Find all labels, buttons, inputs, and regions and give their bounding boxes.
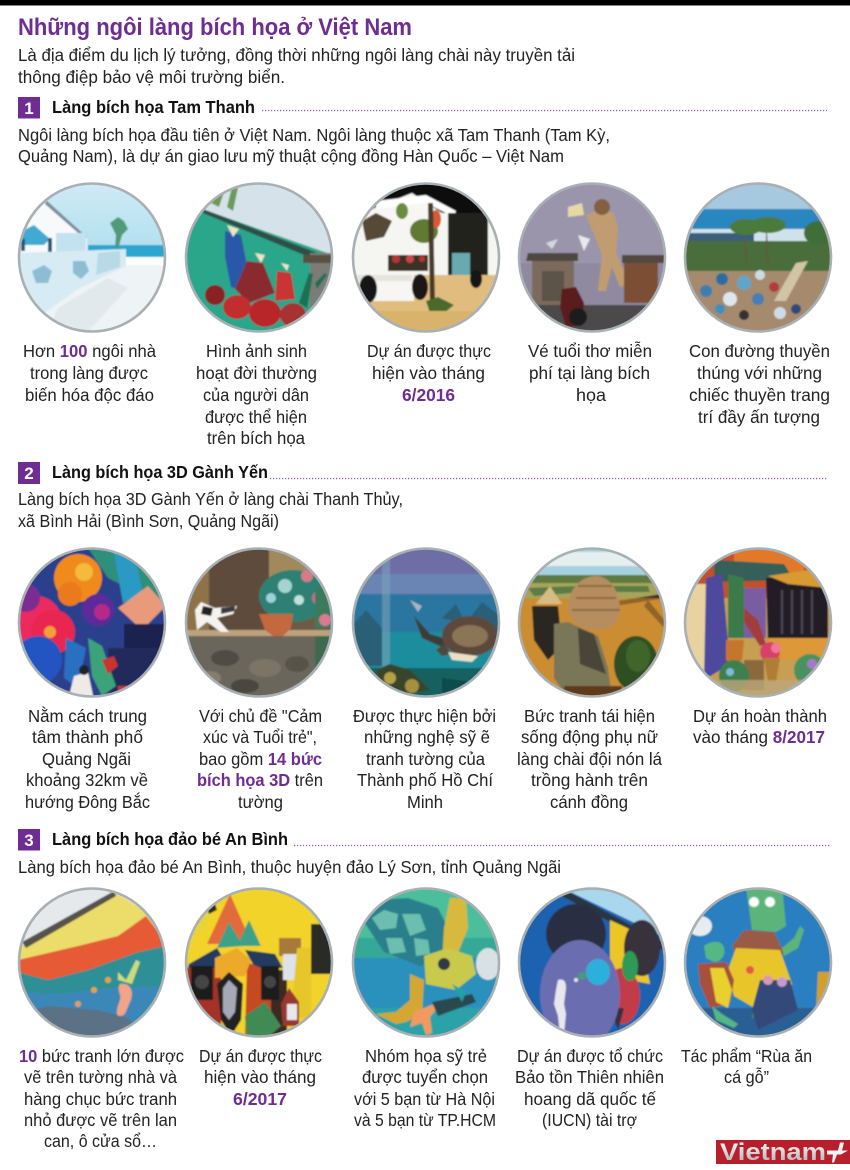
caption 2-2: bích họa 3D trên [197,770,323,790]
caption 2-2: xúc và Tuổi trẻ", [203,727,317,747]
photo 2-4: farmer in conical hat [518,548,666,698]
photo 1-5: aerial of basket boats and palms [684,183,832,333]
photo 3-2: geometric bird mural [185,888,333,1038]
caption 2-5: vào tháng 8/2017 [693,727,825,747]
caption 2-4: Bức tranh tái hiện [524,706,655,726]
section 1 heading: Làng bích họa Tam Thanh [52,97,255,117]
caption 2-3: những nghệ sỹ ẽ [364,727,490,747]
caption 1-3 [367,341,491,405]
caption 3-1: nhỏ được vẽ trên lan [24,1110,177,1130]
caption 1-3: Dự án được thực [367,341,491,361]
caption 2-5 [693,706,827,747]
caption 1-2 [196,341,317,448]
intro text [18,45,575,87]
section 2 heading [18,462,827,484]
photo 3-3: turtle mural in teal [352,888,500,1038]
caption 2-2: tường [238,792,283,812]
caption 1-1: biến hóa độc đáo [25,385,154,405]
photo 3-5: turtles eating fish mural [684,886,832,1038]
logo: Vietnam+: Vietnam [720,1139,826,1166]
caption 1-1: Hơn 100 ngôi nhà [23,341,156,361]
section 2 heading: Làng bích họa 3D Gành Yến [52,462,268,482]
caption 3-3: được tuyển chọn [362,1067,488,1087]
section 2 heading: 2 [24,464,34,483]
photo 3-1: wave wall with seahorse [18,888,166,1038]
section 1 heading: 1 [24,99,34,118]
caption 3-2: hiện vào tháng [204,1067,316,1087]
caption 3-4: hoang dã quốc tế [524,1089,656,1109]
section 1 description [18,125,610,166]
photo 1-2: green mural wall [185,183,333,333]
caption 1-5 [689,341,830,427]
caption 3-4: Bảo tồn Thiên nhiên [515,1067,664,1087]
caption 2-2: bao gồm 14 bức [199,749,322,769]
section 1 description: Quảng Nam), là dự án giao lưu mỹ thuật cộng đồng Hàn Quốc – Việt Nam [18,146,564,166]
caption 2-4: cánh đồng [550,792,628,812]
photo 1-1: white houses by the sea [18,183,168,332]
caption 3-2 [199,1046,322,1109]
section 1 heading [18,97,827,118]
caption 2-1: tâm thành phố [32,727,143,747]
caption 3-2: 6/2017 [233,1089,287,1109]
title: Những ngôi làng bích họa ở Việt Nam [18,14,412,41]
caption 2-1: hướng Đông Bắc [25,791,150,812]
caption 2-1: khoảng 32km về [26,770,148,790]
caption 3-5 [681,1046,812,1087]
section 2 description: Làng bích họa 3D Gành Yến ở làng chài Thanh Thủy, [18,489,403,509]
photo 1-4: boy mural on mauve wall [518,183,666,333]
caption 3-3 [354,1046,496,1130]
caption 2-3: tranh tường của [366,749,485,769]
caption 3-1: 10 bức tranh lớn được [19,1046,184,1066]
caption 2-4 [517,706,662,812]
caption 1-3: 6/2016 [402,385,455,405]
caption 2-1: Quảng Ngãi [42,749,131,769]
caption 1-4: Vé tuổi thơ miễn [528,340,652,361]
caption 1-2: trên bích họa [207,428,305,448]
caption 2-2: Với chủ đề "Cảm [199,706,322,726]
caption 3-1: hàng chục bức tranh [24,1089,177,1109]
caption 1-5: Con đường thuyền [689,341,830,361]
caption 1-3: hiện vào tháng [372,363,485,383]
caption 1-4: họa [576,385,606,405]
caption 1-1: trong làng được [30,363,148,383]
photo 3-4: girl and circles mural [518,888,666,1048]
caption 3-4 [515,1046,664,1130]
caption 1-4: phí tại làng bích [529,363,650,383]
top black bar [0,0,850,6]
caption 3-3: và 5 bạn từ TP.HCM [354,1110,496,1130]
caption 3-5: cá gỗ” [724,1066,769,1087]
caption 1-4 [528,340,652,405]
caption 3-5: Tác phẩm “Rùa ăn [681,1046,812,1066]
caption 2-5: Dự án hoàn thành [693,706,827,726]
caption 2-3: Minh [407,792,443,812]
section 2 description: xã Bình Hải (Bình Sơn, Quảng Ngãi) [18,511,279,531]
caption 2-1: Nằm cách trung [28,705,147,726]
caption 3-4: Dự án được tổ chức [517,1046,663,1066]
caption 3-3: với 5 bạn từ Hà Nội [354,1089,495,1109]
caption 1-2: Hình ảnh sinh [206,341,307,361]
caption 2-3: Thành phố Hồ Chí [357,770,493,790]
section 3 heading: 3 [24,831,34,850]
photo 2-3: sea turtle mural [352,548,500,698]
section 3 description: Làng bích họa đảo bé An Bình, thuộc huyện đảo Lý Sơn, tỉnh Quảng Ngãi [18,857,561,877]
caption 2-4: làng chài đội nón lá [517,749,662,769]
photo 1-3: courtyard with tree [352,183,500,333]
caption 3-1: can, ô cửa sổ… [44,1131,157,1151]
caption 2-3: Được thực hiện bởi [353,706,496,726]
section 3 heading [18,829,830,850]
caption 3-3: Nhóm họa sỹ trẻ [365,1046,487,1066]
caption 2-3 [353,706,496,812]
caption 3-4: (IUCN) tài trợ [542,1110,637,1130]
caption 1-5: chiếc thuyền trang [689,385,830,405]
logo: Vietnam+ [716,1139,850,1166]
intro text: Là địa điểm du lịch lý tưởng, đồng thời những ngôi làng chài này truyền tải [18,45,575,65]
caption 1-5: trí đầy ấn tượng [698,407,820,427]
section 2 description [18,489,403,531]
photo 2-2: cat and flower pot on stone wall [185,548,333,698]
caption 2-1 [25,705,150,812]
intro text: thông điệp bảo vệ môi trường biển. [18,67,285,87]
section 3 heading: Làng bích họa đảo bé An Bình [52,829,288,849]
caption 2-4: sống động phụ nữ [521,727,658,747]
caption 1-5: thúng với những [697,363,822,383]
caption 2-2 [197,706,323,812]
section 1 description: Ngôi làng bích họa đầu tiên ở Việt Nam. Ngôi làng thuộc xã Tam Thanh (Tam Kỳ, [18,125,610,145]
photo 2-1: flower mural [10,548,166,700]
caption 3-1: vẽ trên tường nhà và [24,1067,177,1087]
caption 1-1 [23,341,156,405]
caption 2-4: trồng hành trên [531,770,648,790]
caption 3-2: Dự án được thực [199,1046,322,1066]
caption 1-2: của người dân [203,385,309,405]
caption 1-2: hoạt đời thường [196,363,317,383]
caption 3-1 [19,1046,184,1151]
photo 2-5: house mural with flowers [684,548,832,698]
caption 1-2: được thể hiện [205,407,307,427]
